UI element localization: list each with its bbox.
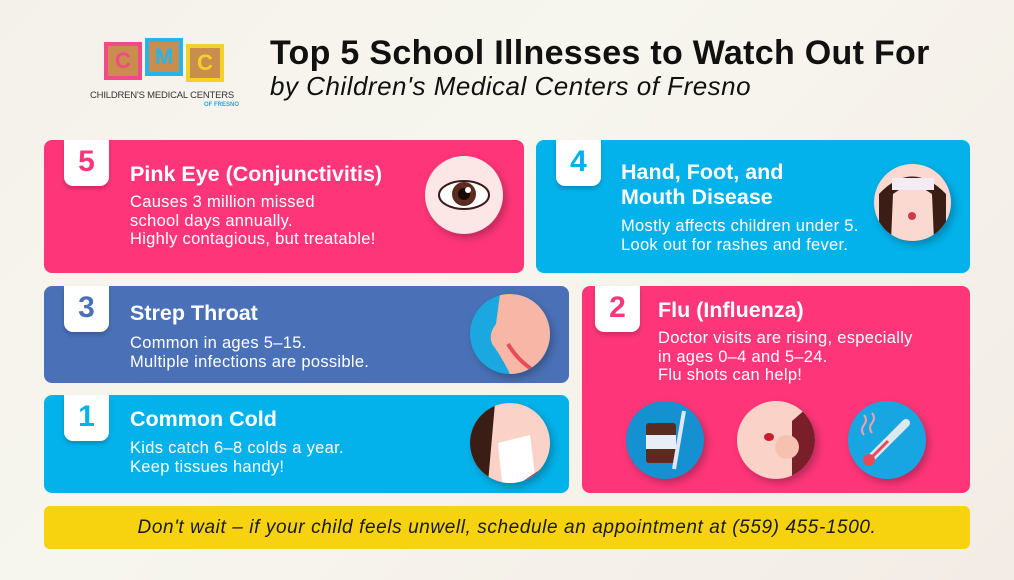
icon: vaccine (626, 401, 704, 479)
callout: appointment bar: Don't wait – if your child feels unwell, schedule an appointment at (559) 455-1500. (138, 517, 876, 538)
heading (621, 160, 783, 209)
logo (90, 38, 239, 108)
number 4: 4 (570, 145, 587, 178)
text: Causes 3 million missed (130, 193, 315, 211)
number 1 (64, 395, 109, 441)
subtitle: by Children's Medical Centers of Fresno (270, 71, 751, 101)
logo blocks: C (115, 48, 131, 73)
logo blocks (104, 38, 224, 82)
text: in ages 0–4 and 5–24. (658, 348, 828, 366)
text (130, 334, 369, 370)
text (130, 193, 376, 248)
heading: Mouth Disease (621, 185, 773, 209)
icon: throat (470, 294, 550, 374)
title: Top 5 School Illnesses to Watch Out For (270, 34, 930, 72)
number 5: 5 (78, 145, 95, 178)
heading: Hand, Foot, and (621, 160, 783, 184)
text (621, 217, 859, 254)
heading: Flu (Influenza) (658, 298, 804, 322)
text: Highly contagious, but treatable! (130, 230, 376, 248)
text: Keep tissues handy! (130, 458, 284, 476)
number 5 (64, 140, 109, 186)
heading: Pink Eye (Conjunctivitis) (130, 162, 382, 186)
panel: strep throat (44, 286, 569, 383)
callout: appointment bar (44, 506, 970, 549)
logo: OF FRESNO (204, 102, 239, 108)
number 2 (595, 286, 640, 332)
text: school days annually. (130, 212, 293, 230)
text: Kids catch 6–8 colds a year. (130, 439, 344, 457)
text: Mostly affects children under 5. (621, 217, 859, 235)
number 3 (64, 286, 109, 332)
icon: cough (737, 401, 815, 479)
logo blocks: C (197, 50, 213, 75)
text: Multiple infections are possible. (130, 352, 369, 370)
text (658, 329, 913, 384)
icon: thermometer (848, 401, 926, 479)
icon: tissue (470, 403, 550, 483)
number 2: 2 (609, 291, 626, 324)
number 1: 1 (78, 400, 95, 433)
icon: child rash (874, 164, 951, 241)
text: Look out for rashes and fever. (621, 236, 848, 254)
panel: common cold (44, 395, 569, 493)
heading: Common Cold (130, 407, 277, 431)
panel: flu (582, 286, 970, 493)
number 4 (556, 140, 601, 186)
logo blocks: M (155, 44, 173, 69)
text: Common in ages 5–15. (130, 334, 307, 352)
panel: hand foot mouth (536, 140, 970, 273)
icon: eye (425, 156, 503, 234)
number 3: 3 (78, 291, 95, 324)
panel: pink eye (44, 140, 524, 273)
text: Doctor visits are rising, especially (658, 329, 913, 347)
heading: Strep Throat (130, 301, 258, 325)
text: Flu shots can help! (658, 366, 802, 384)
logo: CHILDREN'S MEDICAL CENTERS (90, 90, 234, 101)
text (130, 439, 344, 476)
